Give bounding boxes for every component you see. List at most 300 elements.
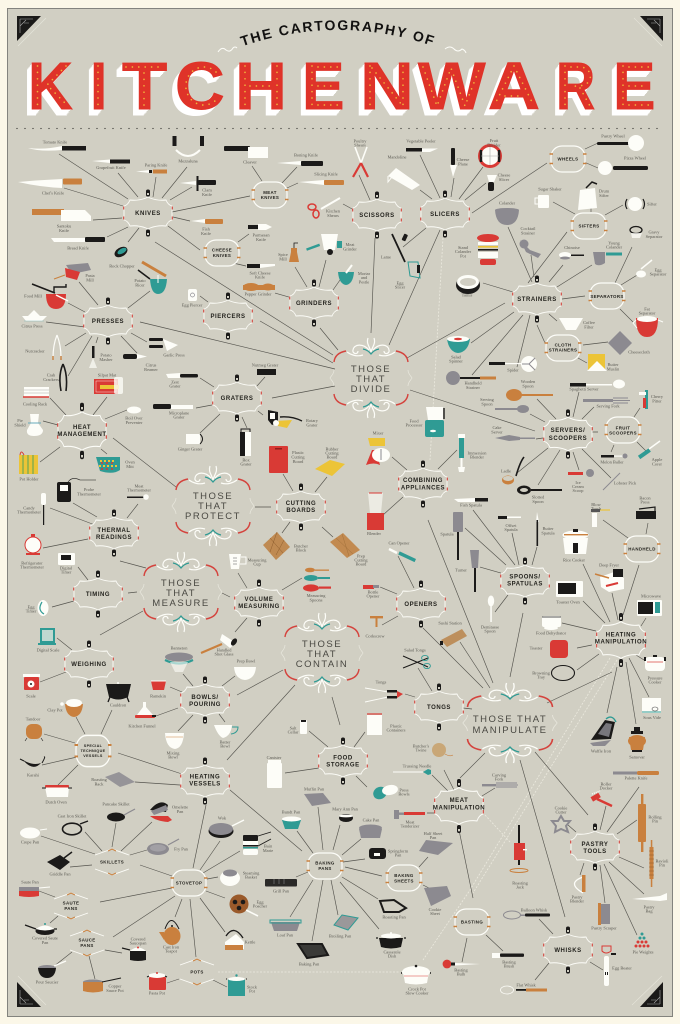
item: slotted spoon: Slotted xyxy=(532,494,545,500)
node: knives: KNIVES xyxy=(135,211,161,217)
item: ice cream scoop: Ice xyxy=(575,480,581,485)
item: canister xyxy=(267,755,282,788)
item: prep bowl: Prep Bowl xyxy=(237,658,256,664)
item: pot holder: Pot Holder xyxy=(19,476,39,482)
node: basting: BASTING xyxy=(461,920,483,924)
item: roller docker: Roller xyxy=(601,782,612,786)
node: handheld xyxy=(624,536,660,562)
item: spice mill xyxy=(278,243,299,262)
item: parmesan knife: Knife xyxy=(256,237,266,242)
node: cutting boards xyxy=(277,484,325,530)
item: rolling pin: Pin xyxy=(652,818,659,824)
node: servers/scoopers xyxy=(544,409,592,459)
item: egg poacher xyxy=(230,894,268,916)
item: covered saute pan xyxy=(25,923,58,945)
item: cheese plane: Cheese xyxy=(457,157,469,162)
item: kettle: Kettle xyxy=(245,940,255,944)
node: bowls/pouring xyxy=(181,676,229,724)
item: food mill xyxy=(24,284,68,309)
item: springform pan xyxy=(369,848,409,859)
item: rock chopper xyxy=(109,245,135,268)
item: boil over preventer xyxy=(125,406,143,425)
item: bottle opener: Bottle xyxy=(368,590,378,594)
node: heat management: MANAGEMENT xyxy=(57,432,107,438)
node: thermal readings xyxy=(90,510,138,556)
item: samovar: Samovar xyxy=(629,754,645,760)
item: immersion blender: Immersion xyxy=(467,450,487,456)
item: butcher's twine: Butcher's xyxy=(413,744,429,748)
item: santoku knife: Knife xyxy=(59,228,69,233)
item: pasta pot: Pasta Pot xyxy=(149,990,166,996)
item: kitchen shears xyxy=(308,198,341,218)
item: crepe pan: Crepe Pan xyxy=(21,840,40,844)
item: cooling rack: Cooling Rack xyxy=(23,402,48,406)
item: baking pan xyxy=(298,944,328,966)
item: clay pot xyxy=(47,699,83,717)
title: KITCHENWARE: W xyxy=(418,49,485,124)
item: potato ricer: Potato xyxy=(134,278,146,283)
item: broiling pan xyxy=(329,915,358,938)
item: blender xyxy=(367,493,384,536)
node: fruit scoopers: SCOOPERS xyxy=(609,430,637,436)
item: stock pot: Pot xyxy=(249,988,256,994)
item: egg timer: Egg xyxy=(27,604,35,610)
item: grill pan: Grill Pan xyxy=(273,888,290,894)
item: carving fork: Fork xyxy=(495,776,504,782)
item: colander xyxy=(495,200,519,225)
item: meat tenderizer: Meat xyxy=(405,820,415,824)
item: mixing bowl: Mixing xyxy=(167,750,180,756)
node: pastry tools: TOOLS xyxy=(583,849,607,855)
item: copper sauce pot xyxy=(83,978,124,993)
item: basting bulb xyxy=(443,960,480,976)
node: separators: SEPARATORS xyxy=(590,294,624,299)
item: measuring spoons: Spoons xyxy=(310,598,323,602)
item: egg piercer xyxy=(182,289,203,308)
item: food dehydrator xyxy=(536,616,567,636)
item: cocktail strainer: Cocktail xyxy=(521,226,536,231)
item: omelette pan: Omelette xyxy=(172,804,188,810)
item: nutcracker: Nutcracker xyxy=(25,348,45,354)
item: butcher's twine: Twine xyxy=(416,748,426,752)
item: probe thermometer xyxy=(57,478,101,502)
item: rotary grater: Rotary xyxy=(306,418,319,423)
node: heating manipulation xyxy=(595,613,647,667)
item: candy thermometer: Thermometer xyxy=(17,510,41,514)
item: kitchen shears: Kitchen xyxy=(326,208,341,214)
item: cocktail strainer: Strainer xyxy=(521,230,535,236)
item: crab crackers: Crab xyxy=(47,372,56,378)
title: KITCHENWARE: K xyxy=(28,49,72,124)
panel: those that manipulate: MANIPULATE xyxy=(472,725,548,736)
item: pie weights xyxy=(633,932,654,954)
node: strainers: STRAINERS xyxy=(517,297,557,303)
item: blow torch: Blow xyxy=(591,502,602,507)
item: fish spatula: Fish Spatula xyxy=(460,502,482,508)
item: microplane grater xyxy=(153,404,193,420)
item: boil over preventer: Preventer xyxy=(126,420,143,425)
node: meat manipulation: MANIPULATION xyxy=(433,806,485,812)
item: plastic cutting board: Cutting xyxy=(291,454,305,460)
item: dutch oven: Dutch Oven xyxy=(45,800,67,804)
item: butter spatula xyxy=(536,512,555,546)
item: soft cheese knife: Soft Cheese xyxy=(249,270,271,276)
item: pressure cooker: Pressure xyxy=(648,676,662,680)
item: fruit divider: Fruit xyxy=(490,138,499,143)
item: crab crackers: Crackers xyxy=(43,377,59,382)
item: mortar and pestle: Mortar xyxy=(358,271,371,276)
item: basting brush: Basting xyxy=(502,960,517,964)
item: tamis: Tamis xyxy=(462,292,473,298)
item: ramekin xyxy=(150,681,167,698)
item: trussing needle: Trussing Needle xyxy=(403,764,431,768)
item: salad spinner xyxy=(447,336,470,364)
item: mary ann pan xyxy=(332,806,359,822)
panel: those that measure xyxy=(140,552,222,632)
item: cookie sheet: Sheet xyxy=(430,911,441,916)
item: tomato knife: Tomato Knife xyxy=(43,140,67,144)
item: mandoline xyxy=(387,154,420,190)
item: probe thermometer: Probe xyxy=(84,487,94,492)
subtitle: the cartography of: THE CARTOGRAPHY OF xyxy=(240,20,434,46)
item: microplane grater: Microplane xyxy=(169,410,189,416)
node: special technique vessels xyxy=(74,735,112,767)
panel: those that contain: THOSE xyxy=(302,639,342,650)
item: cake pan xyxy=(359,818,382,838)
item: nutmeg grater: Nutmeg Grater xyxy=(252,362,279,368)
node: meat manipulation: MEAT xyxy=(450,798,468,804)
item: cherry pitter: Cherry xyxy=(651,394,664,399)
item: blow torch xyxy=(591,502,610,527)
node: thermal readings: READINGS xyxy=(96,535,132,541)
item: salad spinner: Spinner xyxy=(449,358,463,364)
item: loaf pan xyxy=(270,920,301,938)
item: microplane grater: Grater xyxy=(173,414,185,420)
item: crab crackers xyxy=(43,364,67,391)
item: bottle opener xyxy=(363,585,380,598)
item: serving spoon: Serving xyxy=(480,397,495,402)
item: oven mitt: Oven xyxy=(125,460,136,464)
item: ladle xyxy=(501,457,524,484)
item: meat tenderizer xyxy=(394,810,425,828)
node: heating vessels: VESSELS xyxy=(189,782,221,788)
item: plastic cutting board: Plastic xyxy=(292,450,304,455)
node: piercers: PIERCERS xyxy=(210,314,246,320)
item: egg slicer: Egg xyxy=(396,280,404,286)
item: butter muslin: Butter xyxy=(608,362,619,367)
title: KITCHENWARE: N xyxy=(360,49,414,124)
item: basting brush xyxy=(492,953,524,968)
item: box grater: Grater xyxy=(240,462,252,466)
item: food processor xyxy=(405,407,444,437)
item: gravy separator xyxy=(630,226,663,239)
item: covered saucepan: Covered xyxy=(131,936,146,942)
item: can opener xyxy=(388,540,416,562)
item: spatula: Spatula xyxy=(440,532,454,536)
item: pot holder xyxy=(19,452,39,482)
item: lobster pick: Lobster Pick xyxy=(614,480,637,486)
item: nutmeg grater xyxy=(252,362,279,375)
item: pancake skillet: Pancake Skillet xyxy=(102,802,130,806)
item: mandoline: Mandoline xyxy=(387,154,407,160)
node: baking pans: PANS xyxy=(318,866,332,871)
item: paring knife xyxy=(136,162,167,174)
item: karahi xyxy=(20,757,45,778)
title marquee dots xyxy=(38,66,649,106)
item: slicing knife xyxy=(299,172,344,185)
node: baking sheets: SHEETS xyxy=(394,878,414,884)
item: press bowls xyxy=(371,784,410,802)
node: tongs: TONGS xyxy=(427,705,451,711)
item: nutcracker xyxy=(25,335,61,360)
item: basting bulb: Basting xyxy=(454,968,469,972)
item: bain marie: Marie xyxy=(263,848,273,853)
item: egg slicer: Slicer xyxy=(395,284,406,290)
item: food dehydrator: Food Dehydrator xyxy=(536,630,567,636)
node: graters: GRATERS xyxy=(221,396,253,402)
panel: those that contain: THAT xyxy=(307,649,337,660)
item: coffee filter xyxy=(559,318,595,330)
item: mezzaluna xyxy=(172,136,204,164)
item: sugar shaker: Sugar Shaker xyxy=(538,186,562,192)
item: pie shield: Pie xyxy=(17,418,23,423)
item: digital scale xyxy=(37,628,59,652)
item: casserole dish xyxy=(376,932,406,958)
item: refrigerator thermometer xyxy=(20,534,44,570)
item: fat separator xyxy=(633,306,663,337)
item: spice mill: Mill xyxy=(279,256,288,262)
panel: those that contain xyxy=(281,613,363,693)
item: spatula xyxy=(440,512,463,560)
item: mortar and pestle: Pestle xyxy=(359,280,369,284)
item: wok xyxy=(208,816,244,838)
node: spoons/spatulas: SPATULAS xyxy=(507,582,543,588)
item: gravy separator: Gravy xyxy=(649,230,660,234)
item: covered saucepan xyxy=(122,936,147,961)
node: combining appliances: APPLIANCES xyxy=(401,486,445,492)
item: crock pot slow cooker: Crock Pot xyxy=(408,986,427,992)
panel: those that protect: PROTECT xyxy=(185,511,241,522)
item: meat tenderizer: Tenderizer xyxy=(401,824,420,828)
item: poultry shears xyxy=(353,138,368,177)
item: bottle opener: Opener xyxy=(367,594,380,598)
item: carving fork xyxy=(482,772,518,787)
pale dotted link lines xyxy=(218,238,617,972)
item: pie shield xyxy=(14,414,43,436)
item: boning knife xyxy=(277,152,323,166)
item: pepper grinder: Pepper Grinder xyxy=(245,292,272,296)
panel: those that divide: DIVIDE xyxy=(351,384,391,395)
node: slicers xyxy=(421,190,469,238)
item: demitasse spoon: Demitasse xyxy=(481,624,499,630)
item: drum sifter xyxy=(578,182,610,210)
item: fat separator: Fat xyxy=(644,306,651,312)
item: balloon whisk: Balloon Whisk xyxy=(521,908,548,912)
item: lame xyxy=(381,233,408,262)
item: crock pot slow cooker xyxy=(401,965,431,996)
item: bread knife xyxy=(51,237,105,250)
item: copper sauce pot: Copper xyxy=(109,984,122,988)
item: measuring spoons: Measuring xyxy=(307,593,326,598)
item: roasting jack: Jack xyxy=(516,884,525,890)
item: digital timer xyxy=(58,553,75,574)
node: tongs xyxy=(415,684,463,730)
title: KITCHENWARE: E xyxy=(613,49,656,124)
item: tandoor: Tandoor xyxy=(26,716,41,722)
node: sifters: SIFTERS xyxy=(578,224,600,228)
item: ravioli pin xyxy=(649,840,669,887)
item: stock pot xyxy=(226,974,258,996)
item: meat thermometer: Meat xyxy=(134,484,144,488)
title: KITCHENWARE xyxy=(27,49,656,124)
item: young colander: Young xyxy=(608,240,621,246)
item: soft cheese knife xyxy=(247,264,275,280)
item: rotary grater xyxy=(268,410,319,428)
item: butcher block xyxy=(263,532,308,560)
item: cake pan: Cake Pan xyxy=(363,818,380,822)
item: roasting jack: Roasting xyxy=(512,880,529,886)
item: oven mitt: Mitt xyxy=(126,464,135,469)
item: pasta mill xyxy=(54,263,95,282)
item: citrus reamer: Reamer xyxy=(144,367,158,372)
item: banneton: Banneton xyxy=(171,646,188,650)
node: weighing xyxy=(65,640,113,688)
item: bread knife: Bread Knife xyxy=(67,246,89,250)
item: vegetable peeler xyxy=(406,138,438,152)
item: box grater: Box xyxy=(242,458,250,462)
node: whisks xyxy=(544,926,592,974)
node: presses: PRESSES xyxy=(92,319,124,325)
item: ravioli pin: Pin xyxy=(659,862,666,868)
item: chinoise: Chinoise xyxy=(564,245,580,250)
node: fruit scoopers xyxy=(604,417,642,443)
item: salad spinner: Salad xyxy=(451,354,462,360)
item: melon baller: Melon Baller xyxy=(600,460,624,464)
item: cheese slicer: Cheese xyxy=(498,172,510,178)
item: serving fork: Serving Fork xyxy=(596,404,620,408)
item: saute pan xyxy=(19,880,50,897)
item: wooden spoon xyxy=(506,379,553,401)
item: salt cellar: Salt xyxy=(290,726,297,730)
item: bain marie: Bain xyxy=(264,844,273,848)
item: plastic cutting board xyxy=(269,446,305,473)
item: tamis xyxy=(456,275,480,298)
node: weighing: WEIGHING xyxy=(71,662,107,668)
item: kitchen shears: Shears xyxy=(327,213,339,218)
item: coffee filter: Filter xyxy=(584,324,594,330)
item: casserole dish: Casserole xyxy=(383,950,401,954)
item: rubber cutting board: Board xyxy=(327,454,338,460)
panel: those that protect: THAT xyxy=(198,501,228,512)
node: bowls/pouring: POURING xyxy=(189,702,221,708)
node: sauce pans: PANS xyxy=(80,943,94,948)
item: bundt pan xyxy=(282,810,301,829)
node: piercers xyxy=(204,292,252,340)
item: handheld strainer: Strainer xyxy=(466,385,480,390)
item: covered saute pan: Covered Saute xyxy=(32,936,58,940)
node: separators xyxy=(588,283,626,309)
item: palette knife: Palette Knife xyxy=(624,776,648,780)
item: cookie cutter: Cutter xyxy=(556,810,567,814)
item: soft cheese knife: Knife xyxy=(255,274,265,280)
item: digital timer: Timer xyxy=(61,570,72,574)
item: pastry scraper: Pastry Scraper xyxy=(591,926,617,930)
item: poultry shears: Poultry xyxy=(354,138,367,144)
item: offset spatula: Offset xyxy=(506,523,517,528)
item: palette knife xyxy=(613,771,659,780)
item: refrigerator thermometer: Thermometer xyxy=(20,564,44,570)
item: colander: Colander xyxy=(499,200,516,206)
item: cast iron skillet: Cast Iron Skillet xyxy=(58,814,87,818)
item: pressure cooker xyxy=(644,655,666,684)
item: rolling pin xyxy=(638,794,662,852)
item: covered saucepan: Saucepan xyxy=(130,940,147,946)
item: egg timer: Timer xyxy=(26,608,37,614)
item: salt cellar xyxy=(288,720,307,734)
node: volume measuring: MEASURING xyxy=(238,604,280,610)
item: santoku knife: Santoku xyxy=(57,224,72,228)
title: KITCHENWARE: R xyxy=(556,49,595,124)
item: corkscrew: Corkscrew xyxy=(365,634,385,638)
item: cookie sheet: Cookie xyxy=(429,907,441,912)
node: special technique vessels: TECHNIQUE xyxy=(81,749,106,753)
item: vegetable peeler: Vegetable Peeler xyxy=(406,138,436,144)
item: chinoise xyxy=(559,245,584,260)
item: blender: Blender xyxy=(367,531,381,536)
item: pastry wheel: Pastry Wheel xyxy=(601,134,626,138)
item: demitasse spoon xyxy=(481,596,499,634)
node: scissors: SCISSORS xyxy=(359,213,395,219)
item: cast iron teapot xyxy=(159,920,180,954)
node: saute pans xyxy=(54,893,88,919)
item: lame: Lame xyxy=(381,254,391,260)
item: potato ricer: Ricer xyxy=(135,282,145,288)
item: spice mill: Spice xyxy=(278,252,288,257)
item: egg separator xyxy=(636,260,667,278)
item: handled shot glass: Shot Glass xyxy=(215,652,234,656)
item: karahi: Karahi xyxy=(27,772,40,778)
node: presses xyxy=(84,298,132,344)
item: fish knife: Fish xyxy=(202,226,211,232)
node: spoons/spatulas: SPOONS/ xyxy=(509,574,541,580)
item: toaster xyxy=(530,640,568,658)
item: ramekin: Ramekin xyxy=(150,694,167,698)
item: flat whisk: Flat Whisk xyxy=(516,982,536,988)
item: prep bowl xyxy=(234,658,256,680)
node: cutting boards: CUTTING xyxy=(286,501,316,507)
item: clam knife xyxy=(180,176,216,197)
item: microwave: Microwave xyxy=(641,594,661,598)
node: saute pans: SAUTE xyxy=(63,900,79,906)
node: cloth strainers: CLOTH xyxy=(555,342,571,348)
item: canister: Canister xyxy=(267,755,282,760)
item: garlic press: Garlic Press xyxy=(163,352,185,358)
item: pastry bag xyxy=(632,893,667,914)
item: omelette pan: Pan xyxy=(177,809,184,814)
item: stand colander pot: Colander xyxy=(455,249,472,254)
item: serving spoon: Spoon xyxy=(481,402,493,406)
item: griddle pan: Griddle Pan xyxy=(49,872,71,876)
node: whisks: WHISKS xyxy=(554,948,582,954)
node: cloth strainers: STRAINERS xyxy=(549,348,577,352)
item: food processor: Food xyxy=(409,418,419,424)
item: young colander: Colander xyxy=(606,244,623,250)
item: potato ricer xyxy=(134,262,167,294)
item: grapefruit knife xyxy=(92,160,130,170)
item: press bowls: Bowls xyxy=(398,792,410,796)
item: santoku knife xyxy=(32,209,91,233)
node: grinders: GRINDERS xyxy=(296,301,332,307)
